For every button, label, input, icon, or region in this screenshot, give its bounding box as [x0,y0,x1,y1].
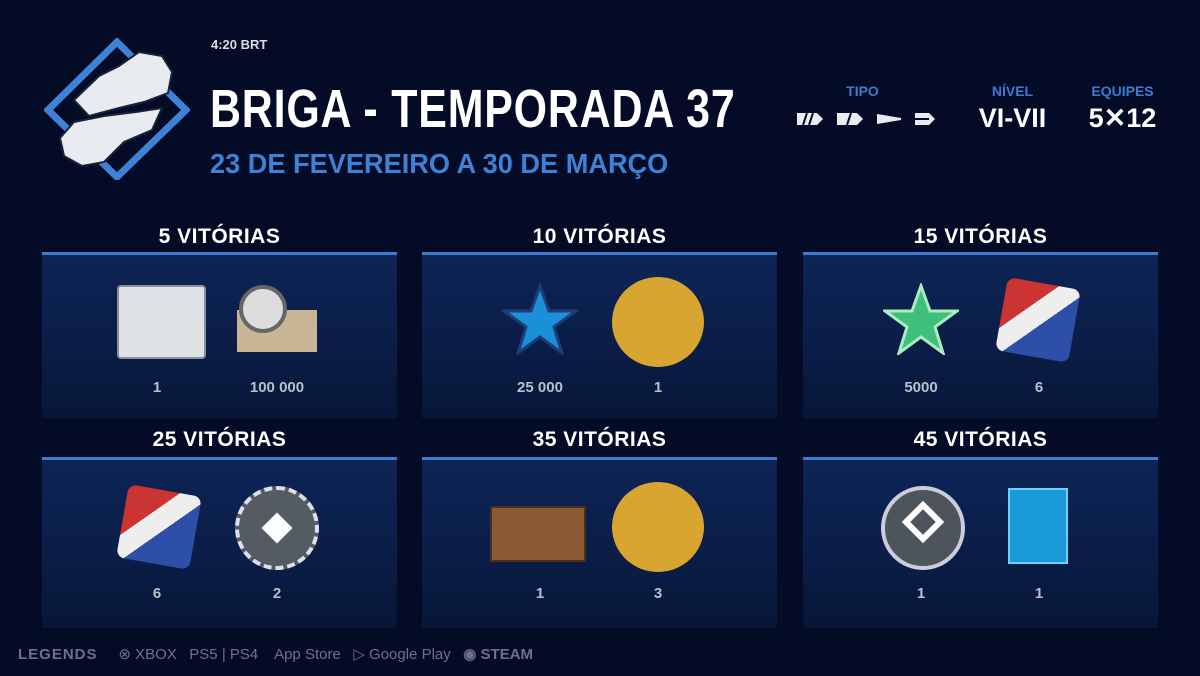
heading: 35 vitorias: 35 VITÓRIAS [533,428,666,451]
icon: blue star [502,283,578,355]
icon: wooden crate with coin [237,285,317,352]
icon: flag patch [116,484,202,570]
panel: 15 vitorias [803,252,1158,418]
info: nivel [979,83,1046,133]
icon: brown crate [490,506,586,562]
icon: white crate [117,285,206,359]
info: equipes: 5✕12 [1089,103,1156,133]
icon: gold emblem [612,277,704,367]
panel: 45 vitorias: 1 [917,585,925,602]
info: equipes: EQUIPES [1091,83,1154,99]
heading: 45 vitorias: 45 VITÓRIAS [914,428,1047,451]
panel: 45 vitorias [803,457,1158,628]
panel: 10 vitorias: 25 000 [517,379,563,396]
info: nivel: VI-VII [979,103,1046,133]
time: 4:20 BRT [211,37,267,52]
heading: 5 vitorias: 5 VITÓRIAS [159,225,280,248]
icon: flag patch [995,277,1081,363]
heading: 15 vitorias: 15 VITÓRIAS [914,225,1047,248]
panel: 45 vitorias: 1 [1035,585,1043,602]
panel: 10 vitorias [422,252,777,418]
title: BRIGA - TEMPORADA 37 [210,79,736,139]
icon: grey badge [235,486,319,570]
heading: 25 vitorias: 25 VITÓRIAS [153,428,286,451]
panel: 15 vitorias: 6 [1035,379,1043,396]
panel: 25 vitorias: 6 [153,585,161,602]
panel: 5 vitorias: 100 000 [250,379,304,396]
heading: 10 vitorias: 10 VITÓRIAS [533,225,666,248]
panel: 25 vitorias: 2 [273,585,281,602]
panel: 5 vitorias: 1 [153,379,161,396]
logo: gauntlets diamond [44,38,190,180]
info: equipes [1089,83,1156,133]
footer platforms: LEGENDS ⊗ XBOX PS5 | PS4 App Store ▷ Google Play ◉ STEAM [18,646,533,663]
info: tipo: TIPO [846,83,879,99]
panel: 10 vitorias: 1 [654,379,662,396]
icon: green star [883,283,959,355]
panel: 15 vitorias: 5000 [904,379,938,396]
panel: 35 vitorias: 1 [536,585,544,602]
panel: 35 vitorias: 3 [654,585,662,602]
icon: blue certificate [1008,488,1068,564]
icon: gold emblem [612,482,704,572]
subtitle dates: 23 DE FEVEREIRO A 30 DE MARÇO [210,148,668,179]
info: tipo [797,83,935,125]
info: nivel: NÍVEL [992,83,1033,99]
icon: silver badge [881,486,965,570]
panel: 25 vitorias [42,457,397,628]
panel: 5 vitorias [42,252,397,418]
panel: 35 vitorias [422,457,777,628]
